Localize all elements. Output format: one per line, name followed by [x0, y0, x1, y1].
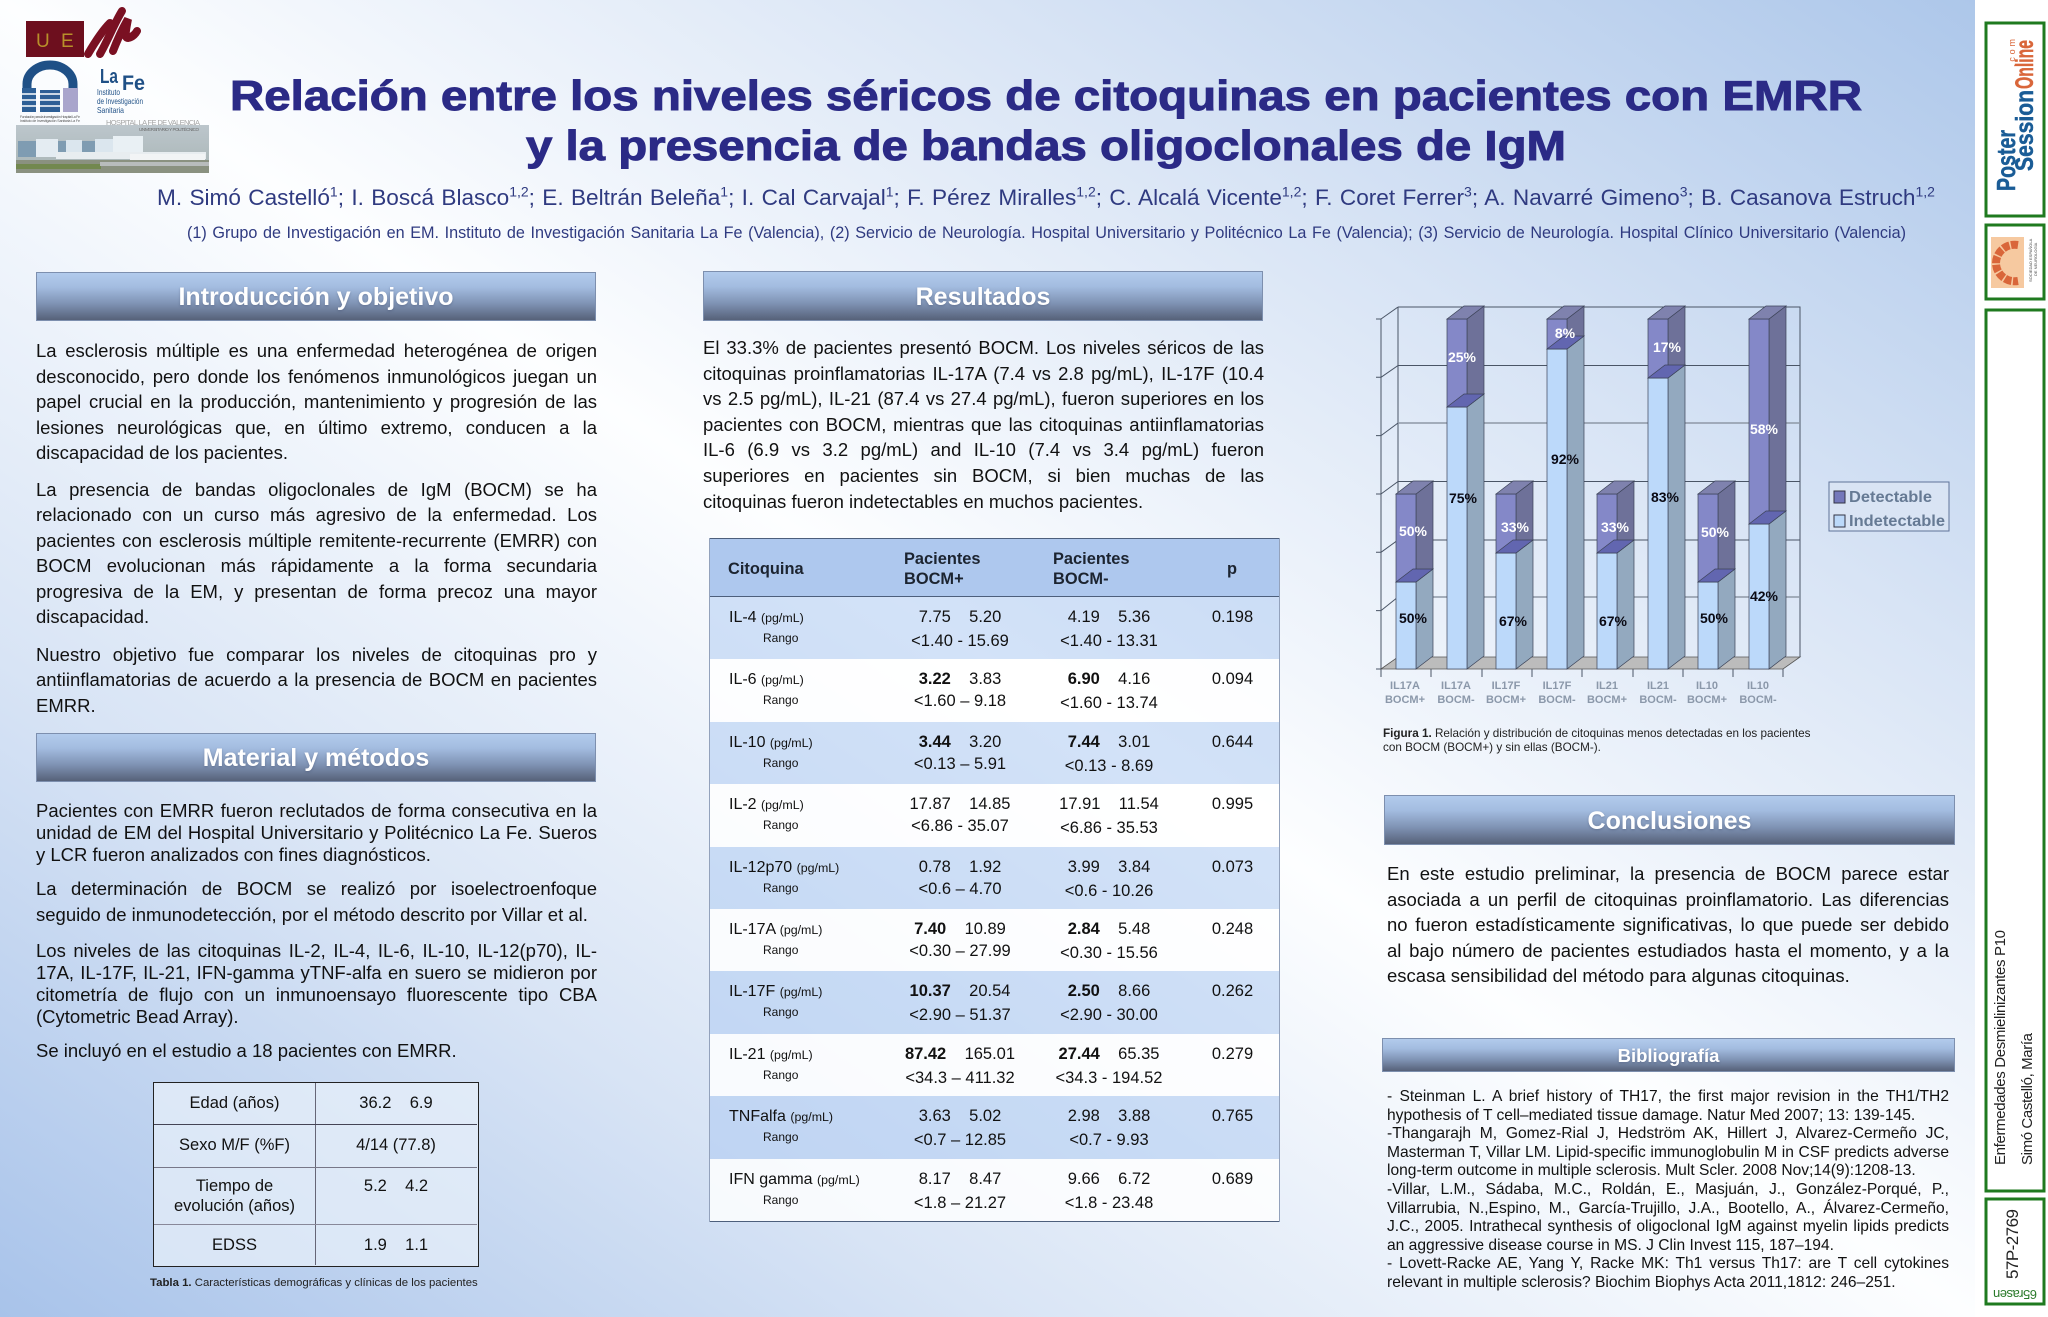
text: material párrafo 2 [36, 878, 597, 925]
box: PosterSessionOnline logo [1986, 23, 2044, 216]
heading: Conclusiones: Conclusiones [1588, 807, 1751, 835]
bar IL10 BOCM- [1749, 306, 1786, 669]
heading: Resultados [703, 271, 1263, 321]
authors: M. Simó Castelló1; I. Boscá Blasco1,2; E. Beltrán Beleña1; I. Cal Carvajal1; F. Pérez Miralles1,2; C. Alcalá Vicente1,2; F. Coret Ferrer3; A. Navarré Gimeno3; B. Casanova Estruch1,2 [157, 183, 1935, 210]
percent labels: indetectable: 67% [1599, 613, 1628, 629]
heading: Conclusiones [1384, 795, 1955, 845]
row IL-17F: 2.50 8.66 [1068, 982, 1150, 1000]
axis labels: BOCM+ [1687, 694, 1727, 706]
row IL-17A: <0.30 - 15.56 [1060, 944, 1158, 962]
row TNFalfa: Rango [763, 1130, 798, 1144]
percent labels: indetectable: 92% [1551, 451, 1580, 467]
caption: figura 1 [1383, 727, 1810, 754]
row IL-12p70: IL-12p70 (pg/mL) [729, 859, 839, 876]
box: PosterSessionOnline logo: Poster [1991, 130, 2021, 191]
bar IL17F BOCM- [1547, 306, 1584, 669]
table 1: características de los pacientes: Tiempo de [196, 1177, 273, 1195]
text: material párrafo 1: Pacientes con EMRR fueron reclutados de forma consecutiva en la [36, 800, 597, 820]
text: bibliografía: - Steinman L. A brief history of TH17, the first major revision in the TH1/TH2 [1387, 1088, 1949, 1105]
box: PosterSessionOnline logo: Online [2011, 40, 2039, 89]
logo: La Fe text: Fe [122, 72, 145, 95]
box: poster code: 65rasen [1993, 1287, 2037, 1302]
percent labels: detectable: 50% [1399, 523, 1428, 539]
row IFN gamma: <1.8 - 23.48 [1065, 1194, 1153, 1212]
row IL-21: <34.3 – 411.32 [905, 1069, 1015, 1087]
text: introducción párrafo 1 [36, 340, 598, 463]
row IL-4: <1.40 - 15.69 [911, 632, 1009, 650]
axis labels: IL10 [1747, 680, 1769, 692]
row IL-4 [709, 597, 1280, 659]
row IL-6: 0.094 [1212, 670, 1253, 688]
logo: tiny foundation caption: Fundación para la investigación Hospital La Fe [20, 115, 80, 119]
row IFN gamma: IFN gamma (pg/mL) [729, 1171, 860, 1188]
text: bibliografía: -Thangarajh M, Gomez-Rial J, Hedström AK, Hillert J, Alvarez-Cermeño JC, [1387, 1125, 1949, 1142]
text: introducción párrafo 1: lesiones neurológicas que, en último extremo, conducen a la [36, 417, 597, 438]
table side borders [709, 538, 1280, 1222]
table 1: características de los pacientes: 36.2 6.9 [359, 1094, 433, 1112]
percent labels: indetectable: 42% [1750, 588, 1779, 604]
row IL-21: 87.42 165.01 [905, 1045, 1015, 1063]
text: resultados: pacientes con BOCM, mientras que las citoquinas antiinflamatorias [703, 414, 1264, 435]
text: material párrafo 3 [36, 940, 597, 1027]
axis labels: IL17F [1543, 680, 1572, 692]
bar IL10 BOCM+ [1698, 481, 1735, 669]
box: session and author: Simó Castelló, María [2019, 1032, 2036, 1165]
row IL-12p70: <0.6 - 10.26 [1065, 882, 1153, 900]
text: bibliografía: long-term outcome in multiple sclerosis. Mult Scler. 2008 Nov;14(9):1208-13. [1387, 1162, 1916, 1179]
row TNFalfa: <0.7 - 9.93 [1069, 1131, 1149, 1149]
axis labels: BOCM+ [1385, 694, 1425, 706]
table header: Pacientes [904, 550, 981, 568]
table header: p [1227, 560, 1237, 578]
row IL-6: <1.60 - 13.74 [1060, 694, 1158, 712]
table 1: características de los pacientes [153, 1082, 479, 1267]
logo: UE box: E [61, 31, 74, 52]
table 1: características de los pacientes: Edad (años) [190, 1094, 279, 1112]
text: introducción párrafo 2: discapacidad. [36, 606, 149, 627]
logo: UE box [26, 21, 84, 57]
row IL-17A [709, 909, 1280, 971]
percent labels: indetectable: 83% [1651, 489, 1680, 505]
row IL-21 [709, 1034, 1280, 1096]
box: Sociedad Española de Neurología logo: DE NEUROLOGÍA [2033, 242, 2038, 276]
row IL-4: 4.19 5.36 [1068, 608, 1150, 626]
title [230, 72, 1862, 169]
row IL-10: 0.644 [1212, 733, 1253, 751]
legend: Detectable [1849, 489, 1932, 506]
row TNFalfa: 3.63 5.02 [919, 1107, 1001, 1125]
text: conclusiones: no fueron estadísticamente significativas, lo que puede ser debido [1387, 914, 1949, 935]
percent labels: detectable: 58% [1750, 421, 1779, 437]
row IL-2: 0.995 [1212, 795, 1253, 813]
row IL-2: Rango [763, 818, 798, 832]
row IL-17F: <2.90 – 51.37 [909, 1006, 1011, 1024]
logo: M scribble [88, 11, 137, 54]
text: resultados [703, 337, 1264, 512]
axis labels: IL17A [1441, 680, 1471, 692]
row IL-17F: 0.262 [1212, 982, 1253, 1000]
percent labels: indetectable: 50% [1700, 610, 1729, 626]
row IL-12p70: 3.99 3.84 [1068, 858, 1150, 876]
percent labels: detectable [1399, 325, 1779, 540]
row IL-21: Rango [763, 1068, 798, 1082]
percent labels: detectable: 50% [1701, 524, 1730, 540]
text: material párrafo 3: Los niveles de las citoquinas IL-2, IL-4, IL-6, IL-10, IL-12(p70), IL- [36, 940, 597, 960]
row IL-6: 3.22 3.83 [919, 670, 1001, 688]
axis labels: BOCM- [1639, 694, 1677, 706]
row TNFalfa: <0.7 – 12.85 [914, 1131, 1006, 1149]
text: material párrafo 4: Se incluyó en el estudio a 18 pacientes con EMRR. [36, 1040, 457, 1060]
row IL-12p70: <0.6 – 4.70 [918, 880, 1002, 898]
text: objetivo: EMRR. [36, 695, 96, 716]
row IL-17A: IL-17A (pg/mL) [729, 921, 822, 938]
row IL-17A: Rango [763, 943, 798, 957]
caption: figura 1: con BOCM (BOCM+) y sin ellas (BOCM-). [1383, 741, 1601, 754]
row IL-17F: <2.90 - 30.00 [1060, 1006, 1158, 1024]
legend [1829, 482, 1949, 531]
side strip: congress boxes [1984, 22, 2046, 1306]
table header: Citoquina [728, 560, 804, 578]
text: bibliografía: -Villar, L.M., Sádaba, M.C., Roldán, E., Masjuán, J., González-Porqué, P., [1387, 1181, 1949, 1198]
heading: Bibliografía: Bibliografía [1618, 1045, 1719, 1066]
logo: La Fe text: de Investigación [97, 96, 143, 106]
text: bibliografía: relevant in multiple sclerosis? Biochim Biophys Acta 2011,1812: 246–251. [1387, 1274, 1896, 1291]
axis labels [1385, 680, 1777, 706]
row IFN gamma [709, 1159, 1280, 1222]
row IL-12p70 [709, 847, 1280, 909]
row IL-6: Rango [763, 693, 798, 707]
box: PosterSessionOnline logo: Session [2011, 90, 2039, 171]
text: introducción párrafo 2: pacientes con esclerosis múltiple remitente-recurrente (EMRR) con [36, 530, 597, 551]
row IL-10: <0.13 – 5.91 [914, 755, 1006, 773]
table header: BOCM- [1053, 570, 1109, 588]
row IL-17F [709, 971, 1280, 1034]
text: material párrafo 3: citometría de flujo con un inmunoensayo fluorescente tipo CBA [36, 984, 597, 1005]
chart axes and grid [1376, 307, 1800, 677]
row IL-12p70: 0.78 1.92 [919, 858, 1001, 876]
text: material párrafo 2: seguido de inmunodetección, por el método descrito por Villar et al. [36, 904, 588, 925]
table 1: características de los pacientes: EDSS [212, 1236, 257, 1254]
row IFN gamma: Rango [763, 1193, 798, 1207]
logo: tiny foundation caption [20, 115, 80, 123]
text: introducción párrafo 2: progresiva de la EM, y presentan de forma precoz una mayor [36, 581, 597, 602]
text: material párrafo 1 [36, 800, 598, 865]
table 1: características de los pacientes: Sexo M/F (%F) [179, 1136, 290, 1154]
axis labels: IL21 [1647, 680, 1669, 692]
text: objetivo: Nuestro objetivo fue comparar los niveles de citoquinas pro y [36, 644, 597, 664]
text: conclusiones: En este estudio preliminar, la presencia de BOCM parece estar [1387, 863, 1949, 884]
axis labels: IL17A [1390, 680, 1420, 692]
percent labels: indetectable [1399, 451, 1779, 629]
bar IL17A BOCM+ [1396, 481, 1433, 669]
text: material párrafo 3: 17A, IL-17F, IL-21, IFN-gamma yTNF-alfa en suero se midieron por [36, 962, 597, 983]
row IL-17A: <0.30 – 27.99 [909, 942, 1011, 960]
text: introducción párrafo 2: BOCM evolucionan más rápidamente a la forma secundaria [36, 555, 597, 576]
text: bibliografía: Masterman T, Villar LM. Lipid-specific immunoglobulin M in CSF predicts adverse [1387, 1144, 1949, 1161]
text: conclusiones: al bajo número de pacientes estudiados hasta el momento, y a la [1387, 940, 1949, 961]
axis labels: IL10 [1696, 680, 1718, 692]
text: material párrafo 2: La determinación de BOCM se realizó por isoelectroenfoque [36, 878, 597, 899]
row IL-17F: 10.37 20.54 [910, 982, 1010, 1000]
row TNFalfa [709, 1096, 1280, 1159]
title: Relación entre los niveles séricos de citoquinas en pacientes con EMRR [230, 72, 1862, 119]
row IL-6: 6.90 4.16 [1068, 670, 1150, 688]
heading: Material y métodos [36, 733, 596, 782]
row IL-17A: 7.40 10.89 [914, 920, 1006, 938]
text: resultados: El 33.3% de pacientes presentó BOCM. Los niveles séricos de las [703, 337, 1264, 358]
text: material párrafo 3: (Cytometric Bead Array). [36, 1006, 239, 1027]
percent labels: indetectable: 67% [1499, 613, 1528, 629]
logo: IHI arch [22, 65, 78, 112]
image: hospital building [16, 118, 209, 173]
axis labels: BOCM- [1739, 694, 1777, 706]
row IL-10 [709, 722, 1280, 784]
box: Sociedad Española de Neurología logo [1986, 225, 2044, 299]
chart: barras 3D citoquinas [1376, 305, 1950, 706]
percent labels: detectable: 25% [1448, 349, 1477, 365]
row IL-6: IL-6 (pg/mL) [729, 671, 804, 688]
text: introducción párrafo 1: discapacidad de los pacientes. [36, 442, 288, 463]
text: conclusiones: escasa sensibilidad del método para algunas citoquinas. [1387, 965, 1850, 986]
row IL-6: <1.60 – 9.18 [914, 692, 1006, 710]
logo: La Fe text [97, 66, 145, 115]
axis labels: BOCM+ [1587, 694, 1627, 706]
heading: Introducción y objetivo: Introducción y objetivo [178, 283, 454, 311]
text: introducción párrafo 2: relacionado con un curso más agresivo de la enfermedad. Los [36, 504, 597, 525]
text: introducción párrafo 1: papel crucial en la producción, mantenimiento y progresión de las [36, 391, 597, 412]
bar IL17F BOCM+ [1496, 481, 1533, 669]
row IL-4: 0.198 [1212, 608, 1253, 626]
row IL-10: 3.44 3.20 [919, 733, 1001, 751]
text: bibliografía: J.C., 2005. Intrathecal synthesis of oligoclonal IgM against myelin lipids predicts [1387, 1218, 1949, 1235]
row TNFalfa: TNFalfa (pg/mL) [729, 1108, 833, 1125]
text: introducción párrafo 2: La presencia de bandas oligoclonales de IgM (BOCM) se ha [36, 478, 597, 500]
bar IL21 BOCM+ [1597, 481, 1634, 669]
row IL-17A: 2.84 5.48 [1068, 920, 1150, 938]
affiliations: (1) Grupo de Investigación en EM. Instituto de Investigación Sanitaria La Fe (Valencia), (2) Servicio de Neurología. Hospital Universitario y Politécnico La Fe (Valencia); (3) Servicio de Neurología. Hospital Clínico Universitario (Valencia) [187, 224, 1906, 242]
text: resultados: IL-6 (6.9 vs 3.2 pg/mL) and IL-10 (7.4 vs 3.4 pg/mL) fueron [703, 439, 1264, 460]
heading: Resultados: Resultados [916, 283, 1050, 311]
table 1: características de los pacientes: 1.9 1.1 [364, 1236, 428, 1254]
text: bibliografía [1387, 1088, 1949, 1291]
row IL-21: IL-21 (pg/mL) [729, 1046, 813, 1063]
text: resultados: superiores en pacientes sin BOCM, si bien muchas de las [703, 465, 1264, 486]
row IL-17F: Rango [763, 1005, 798, 1019]
bar IL17A BOCM- [1447, 306, 1484, 669]
axis labels: IL17F [1492, 680, 1521, 692]
text: bibliografía: an aggressive disease course in MS. J Clin Invest 115, 187–194. [1387, 1237, 1834, 1254]
legend: Indetectable [1849, 513, 1945, 530]
heading: Bibliografía [1382, 1038, 1955, 1072]
logo: La Fe text: La [100, 66, 119, 88]
text: bibliografía: hypothesis of T cell–mediated tissue damage. Natur Med 2007; 13: 139-145. [1387, 1107, 1915, 1124]
text: objetivo [36, 644, 597, 716]
bar IL21 BOCM- [1648, 306, 1685, 669]
row IL-2: IL-2 (pg/mL) [729, 796, 804, 813]
text: introducción párrafo 1: La esclerosis múltiple es una enfermedad heterogénea de origen [36, 340, 597, 361]
chart floor [1381, 657, 1800, 669]
row IL-2: 17.87 14.85 [910, 795, 1010, 813]
box: Sociedad Española de Neurología logo: SOCIEDAD ESPAÑOLA [2028, 238, 2033, 282]
row IL-2: <6.86 - 35.53 [1060, 819, 1158, 837]
row IFN gamma: 9.66 6.72 [1068, 1170, 1150, 1188]
percent labels: indetectable: 50% [1399, 610, 1428, 626]
row IL-10: <0.13 - 8.69 [1065, 757, 1153, 775]
row IL-2: <6.86 - 35.07 [911, 817, 1009, 835]
table 1: características de los pacientes: 4/14 (77.8) [356, 1136, 436, 1154]
row IL-21: 0.279 [1212, 1045, 1253, 1063]
percent labels: detectable: 33% [1601, 519, 1630, 535]
table header: Pacientes [1053, 550, 1130, 568]
row IL-4: IL-4 (pg/mL) [729, 609, 804, 626]
row IL-6 [709, 659, 1280, 722]
row TNFalfa: 2.98 3.88 [1068, 1107, 1150, 1125]
row IL-21: <34.3 - 194.52 [1056, 1069, 1162, 1087]
text: material párrafo 1: y LCR fueron analizados con fines diagnósticos. [36, 844, 431, 865]
row IL-10: IL-10 (pg/mL) [729, 734, 813, 751]
box: session and author [1986, 310, 2044, 1191]
image: hospital building: UNIVERSITARIO Y POLITÉCNICO [139, 126, 199, 132]
row IFN gamma: 8.17 8.47 [919, 1170, 1001, 1188]
row IL-17A: 0.248 [1212, 920, 1253, 938]
table header [709, 538, 1280, 597]
row IL-12p70: 0.073 [1212, 858, 1253, 876]
text: objetivo: antiinflamatorias de acuerdo a la presencia de BOCM en pacientes [36, 669, 597, 690]
row IL-4: 7.75 5.20 [919, 608, 1001, 626]
text: material párrafo 1: unidad de EM del Hospital Universitario y Politécnico La Fe. Sueros [36, 822, 597, 843]
table 2: citoquinas [709, 538, 1280, 1222]
row IFN gamma: <1.8 – 21.27 [914, 1194, 1006, 1212]
row IL-4: Rango [763, 631, 798, 645]
row IL-17F: IL-17F (pg/mL) [729, 983, 822, 1000]
axis labels: BOCM- [1538, 694, 1576, 706]
image: hospital building: HOSPITAL LA FE DE VALENCIA [106, 118, 200, 127]
heading: Introducción y objetivo [36, 272, 596, 321]
axis labels: IL21 [1596, 680, 1618, 692]
box: poster code: 57P-2769 [2003, 1209, 2022, 1279]
percent labels: detectable: 33% [1501, 519, 1530, 535]
row IL-10: Rango [763, 756, 798, 770]
text: resultados: vs 2.5 pg/mL), IL-21 (87.4 vs 27.4 pg/mL), fueron superiores en los [703, 388, 1264, 409]
heading: Material y métodos: Material y métodos [203, 744, 429, 772]
row IL-4: <1.40 - 13.31 [1060, 632, 1158, 650]
logo: UE box: U [36, 31, 50, 52]
percent labels: detectable: 17% [1653, 339, 1682, 355]
caption: figura 1: Figura 1. Relación y distribución de citoquinas menos detectadas en los pacientes [1383, 727, 1810, 740]
text: introducción párrafo 2 [36, 478, 598, 627]
logo: La Fe text: Instituto [97, 87, 120, 97]
row IL-12p70: Rango [763, 881, 798, 895]
table 1: características de los pacientes: evolución (años) [174, 1197, 295, 1215]
row TNFalfa: 0.765 [1212, 1107, 1253, 1125]
logo: tiny foundation caption: Instituto de Investigación Sanitaria La Fe [20, 119, 80, 123]
text: resultados: citoquinas proinflamatorias IL-17A (7.4 vs 2.8 pg/mL), IL-17F (10.4 [703, 363, 1264, 384]
axis labels: BOCM- [1437, 694, 1475, 706]
text: bibliografía: Villarrubia, N.,Espino, M., García-Trujillo, J.A., Bootello, A., Álvarez-Cermeño, [1387, 1200, 1949, 1217]
text: conclusiones [1387, 863, 1950, 986]
text: introducción párrafo 1: desconocido, pero donde los fenómenos inmunológicos juegan un [36, 366, 597, 387]
logos: UEM, IHI, La Fe, hospital [16, 7, 209, 173]
title: y la presencia de bandas oligoclonales de IgM [526, 122, 1566, 169]
text: conclusiones: asociada a un perfil de citoquinas proinflamatorio. Las diferencias [1387, 889, 1949, 910]
row IL-2 [709, 784, 1280, 847]
row IL-10: 7.44 3.01 [1068, 733, 1150, 751]
row IL-2: 17.91 11.54 [1059, 795, 1159, 813]
text: bibliografía: - Lovett-Racke AE, Yang Y, Racke MK: Th1 versus Th17: are T cell cytokines [1387, 1255, 1949, 1272]
axis labels: BOCM+ [1486, 694, 1526, 706]
row IL-21: 27.44 65.35 [1059, 1045, 1159, 1063]
table header: BOCM+ [904, 570, 964, 588]
logo: La Fe text: Sanitaria [97, 105, 124, 115]
percent labels: detectable: 8% [1555, 325, 1576, 341]
table 1: características de los pacientes: 5.2 4.2 [364, 1177, 428, 1195]
box: session and author: Enfermedades Desmielinizantes P10 [1992, 930, 2009, 1165]
box: poster code [1986, 1199, 2044, 1304]
box: PosterSessionOnline logo: .com [2007, 39, 2017, 67]
row IFN gamma: 0.689 [1212, 1170, 1253, 1188]
percent labels: indetectable: 75% [1449, 490, 1478, 506]
text: resultados: citoquinas fueron indetectables en muchos pacientes. [703, 491, 1143, 512]
caption: tabla 1: Tabla 1. Características demográficas y clínicas de los pacientes [150, 1277, 478, 1289]
